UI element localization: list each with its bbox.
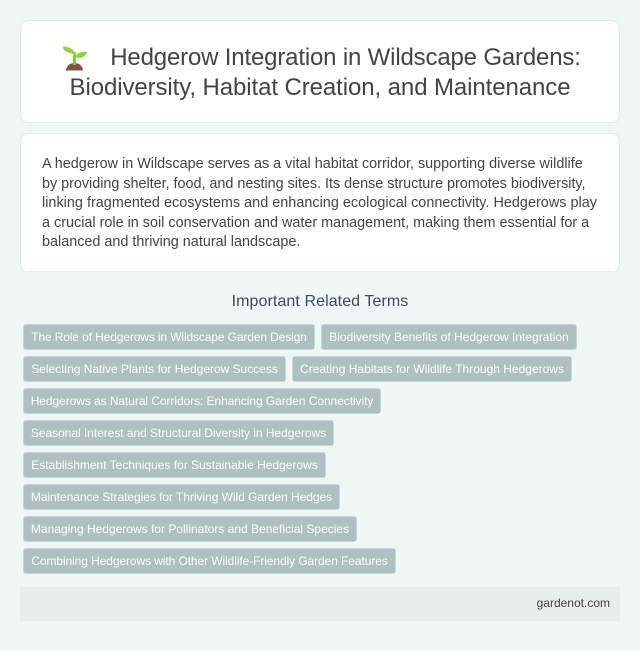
title: Hedgerow Integration in Wildscape Gardens:: [110, 44, 581, 71]
chip: Hedgerows as Natural Corridors: Enhancing Garden Connectivity: [31, 394, 373, 408]
chip: [321, 324, 577, 350]
chip: [23, 388, 381, 414]
chip: Seasonal Interest and Structural Diversity in Hedgerows: [31, 426, 326, 440]
chip: [23, 420, 334, 446]
chip: Biodiversity Benefits of Hedgerow Integration: [329, 330, 569, 344]
description text: by providing shelter, food, and nesting sites. Its dense structure promotes biodiversity,: [42, 176, 585, 192]
chip: [23, 452, 326, 478]
heading: related terms: Important Related Terms: [232, 293, 408, 310]
chip: Maintenance Strategies for Thriving Wild Garden Hedges: [31, 490, 332, 504]
icon: seedling: [63, 46, 87, 70]
chip: Managing Hedgerows for Pollinators and Beneficial Species: [31, 522, 349, 536]
panel: related terms chips: [23, 324, 577, 574]
footer source: gardenot.com: [537, 596, 610, 610]
chip: [292, 356, 572, 382]
description text: A hedgerow in Wildscape serves as a vital habitat corridor, supporting diverse wildlife: [42, 156, 583, 172]
title: Biodiversity, Habitat Creation, and Maintenance: [70, 74, 570, 101]
description text: [42, 156, 597, 250]
footer bar: [20, 587, 620, 621]
chip: Establishment Techniques for Sustainable Hedgerows: [31, 458, 318, 472]
chip: [23, 516, 357, 542]
chip: [23, 356, 286, 382]
chip: [23, 484, 340, 510]
chip: Selecting Native Plants for Hedgerow Success: [31, 362, 278, 376]
chip: [23, 324, 315, 350]
panel: title card: [20, 20, 620, 123]
description text: a crucial role in soil conservation and water management, making them essential for a: [42, 214, 589, 230]
title: [70, 44, 581, 101]
chip: Combining Hedgerows with Other Wildlife-Friendly Garden Features: [31, 554, 388, 568]
chip: Creating Habitats for Wildlife Through Hedgerows: [300, 362, 564, 376]
chip: [23, 548, 396, 574]
description text: balanced and thriving natural landscape.: [42, 234, 300, 250]
description text: linking fragmented ecosystems and enhancing ecological connectivity. Hedgerows play: [42, 195, 597, 211]
panel: description: [20, 133, 620, 272]
chip: The Role of Hedgerows in Wildscape Garden Design: [31, 330, 307, 344]
